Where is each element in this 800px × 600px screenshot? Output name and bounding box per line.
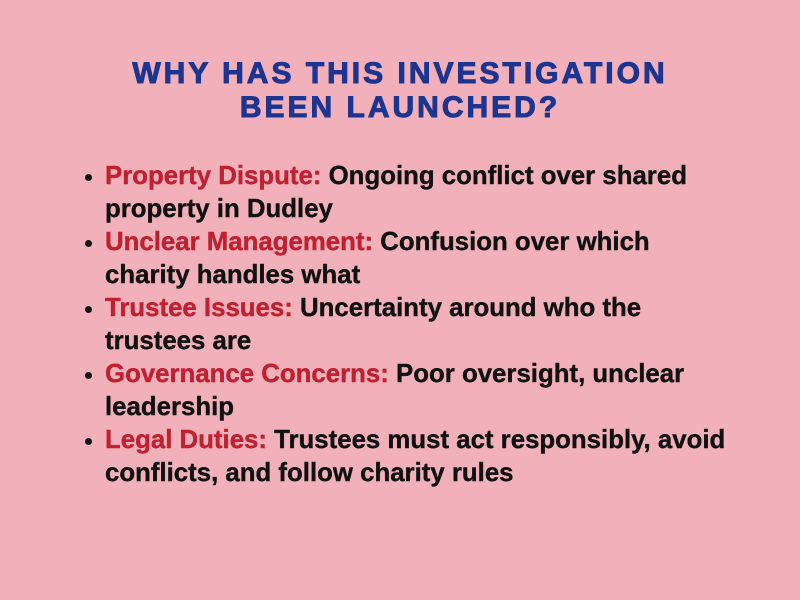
bullet list bbox=[85, 162, 725, 487]
bullet: legal duties: conflicts, and follow charity rules bbox=[105, 459, 514, 487]
bullet: unclear management bbox=[82, 226, 800, 292]
bullet: legal duties: Legal Duties: Trustees must act responsibly, avoid bbox=[105, 426, 725, 454]
bullet: legal duties bbox=[82, 424, 800, 490]
bullet: unclear management: Unclear Management: Confusion over which bbox=[105, 228, 650, 256]
bullet: governance concerns: leadership bbox=[105, 393, 234, 421]
bullet: governance concerns: Governance Concerns: Poor oversight, unclear bbox=[105, 360, 684, 388]
title: BEEN LAUNCHED? bbox=[240, 91, 560, 124]
bullet: property dispute: property in Dudley bbox=[105, 195, 333, 223]
bullet: unclear management: charity handles what bbox=[105, 261, 360, 289]
title: WHY HAS THIS INVESTIGATION bbox=[132, 57, 668, 90]
bullet: property dispute bbox=[82, 160, 800, 226]
bullet: trustee issues: Trustee Issues: Uncertainty around who the bbox=[105, 294, 641, 322]
bullet: property dispute: Property Dispute: Ongoing conflict over shared bbox=[105, 162, 687, 190]
bullet: trustee issues bbox=[82, 292, 800, 358]
bullet: trustee issues: trustees are bbox=[105, 327, 251, 355]
bullet: governance concerns bbox=[82, 358, 800, 424]
title bbox=[132, 57, 668, 124]
